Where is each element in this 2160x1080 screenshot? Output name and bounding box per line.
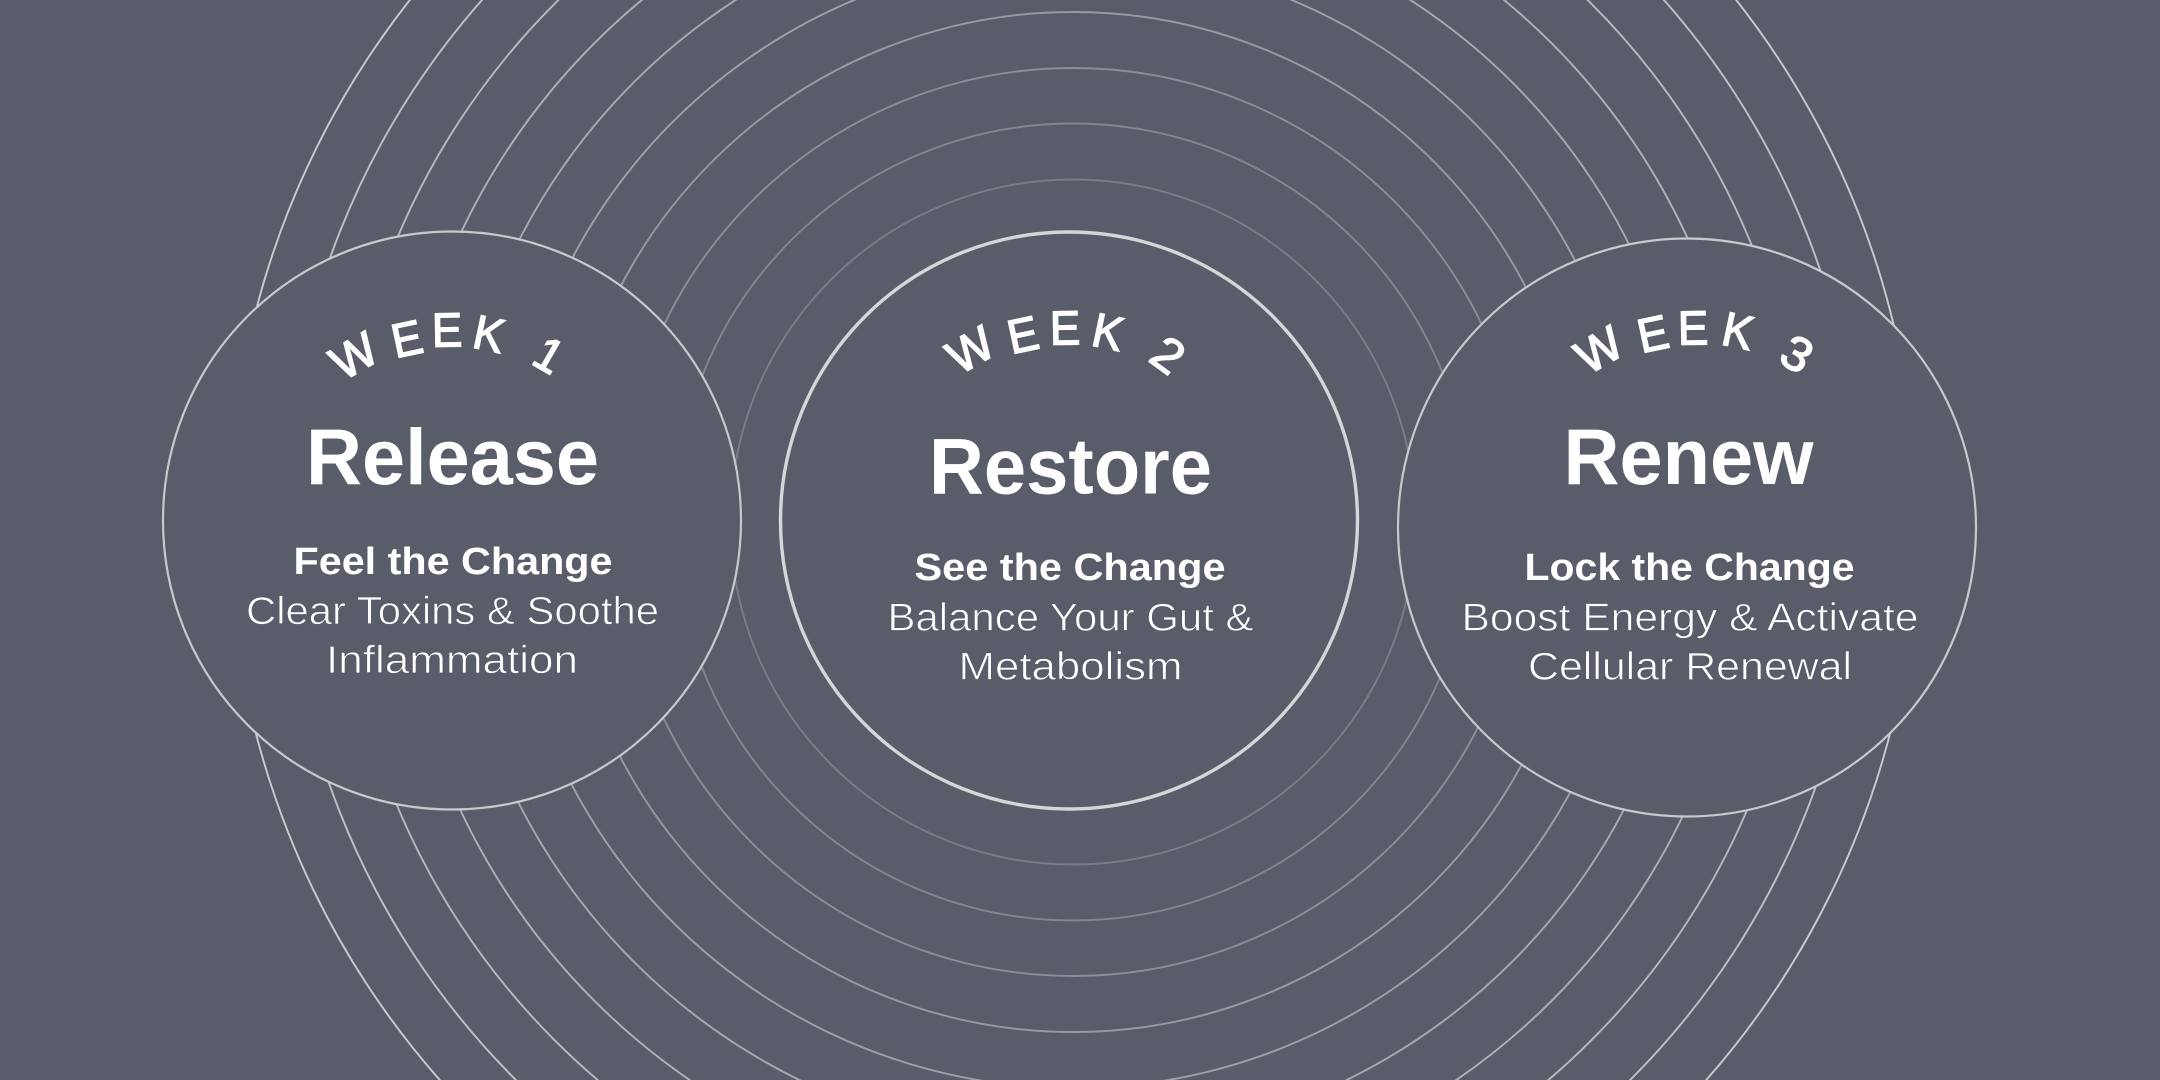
week 2 curved label: 2 [1141,325,1195,385]
week 3 curved label: W [1567,316,1633,385]
week 2 title: Restore [929,422,1212,510]
week 2 curved label: E [1049,301,1081,355]
week 2 subtitle: See the Change [914,547,1226,589]
week 2 circle [780,232,1358,809]
week 2 curved label [938,301,1195,385]
panel: week 3 Renew [1398,238,1976,816]
week 1 curved label: 1 [525,326,573,385]
panel: week 1 Release [163,232,741,810]
week 2 description [888,596,1254,688]
week 2 description: Metabolism [958,646,1182,688]
panel: week 2 Restore [780,232,1358,809]
week 1 description: Inflammation [326,639,578,682]
week 2 curved label: E [1003,306,1043,364]
week 1 curved label [322,303,573,391]
week 1 title: Release [306,412,599,501]
week 3 description: Cellular Renewal [1528,646,1852,688]
week 2 curved label: W [938,316,1004,385]
week 1 curved label: W [322,322,388,391]
week 3 curved label: 3 [1771,324,1822,385]
week 3 curved label: E [1633,305,1673,363]
week 3 curved label: E [1677,301,1709,355]
week 3 description [1462,596,1918,688]
week 2 curved label: K [1088,303,1128,361]
week 1 curved label: E [387,310,427,368]
week 3 title: Renew [1564,412,1814,501]
week 2 description: Balance Your Gut & [888,596,1254,640]
week 3 curved label [1567,301,1822,385]
week 1 description: Clear Toxins & Soothe [246,590,659,633]
concentric rings background [229,0,1917,1080]
week 3 curved label: K [1718,302,1758,360]
week 3 description: Boost Energy & Activate [1462,596,1918,640]
week 3 subtitle: Lock the Change [1524,547,1854,589]
week 3 circle [1398,238,1976,816]
week 1 subtitle: Feel the Change [294,541,612,583]
week 1 description [246,590,659,682]
week 1 curved label: E [431,303,463,357]
week 1 curved label: K [469,305,509,363]
week 1 circle [163,232,741,810]
